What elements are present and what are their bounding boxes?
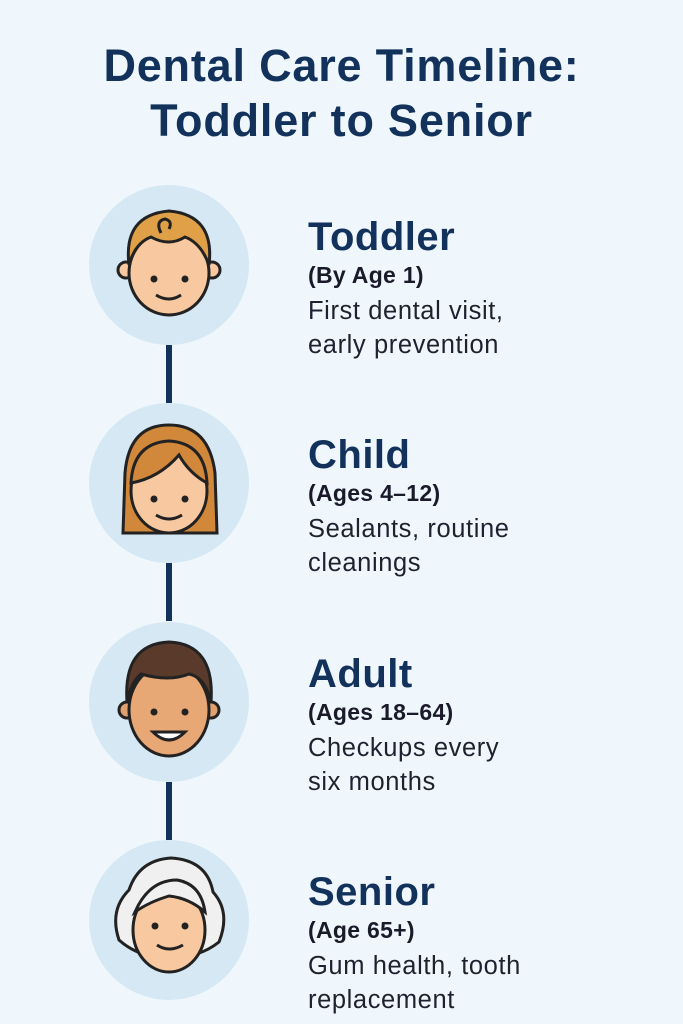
text: adult: Checkups every — [308, 734, 499, 762]
text: toddler: (By Age 1) — [308, 262, 424, 288]
text: child: Child — [308, 433, 410, 477]
text: senior: replacement — [308, 986, 455, 1014]
text: toddler — [308, 215, 504, 359]
text: child: Sealants, routine — [308, 515, 510, 543]
title — [103, 40, 580, 146]
text: child: (Ages 4–12) — [308, 480, 440, 506]
text: toddler: early prevention — [308, 331, 499, 359]
title: Toddler to Senior — [150, 95, 533, 146]
text: adult: Adult — [308, 652, 413, 696]
text: adult: (Ages 18–64) — [308, 699, 454, 725]
connector — [166, 782, 172, 840]
text: toddler: First dental visit, — [308, 297, 504, 325]
icon: toddler — [89, 185, 249, 345]
text: senior: (Age 65+) — [308, 917, 415, 943]
icon: adult — [89, 622, 249, 782]
text: toddler: Toddler — [308, 215, 455, 259]
connector — [166, 345, 172, 403]
text: senior: Gum health, tooth — [308, 952, 521, 980]
text: child — [308, 433, 510, 577]
connector — [166, 563, 172, 621]
title: Dental Care Timeline: — [103, 40, 580, 91]
text: senior: Senior — [308, 870, 435, 914]
text: senior — [308, 870, 521, 1014]
text: adult — [308, 652, 499, 796]
icon: senior — [89, 840, 249, 1000]
icon: child — [89, 403, 249, 563]
text: adult: six months — [308, 768, 436, 796]
text: child: cleanings — [308, 549, 421, 577]
